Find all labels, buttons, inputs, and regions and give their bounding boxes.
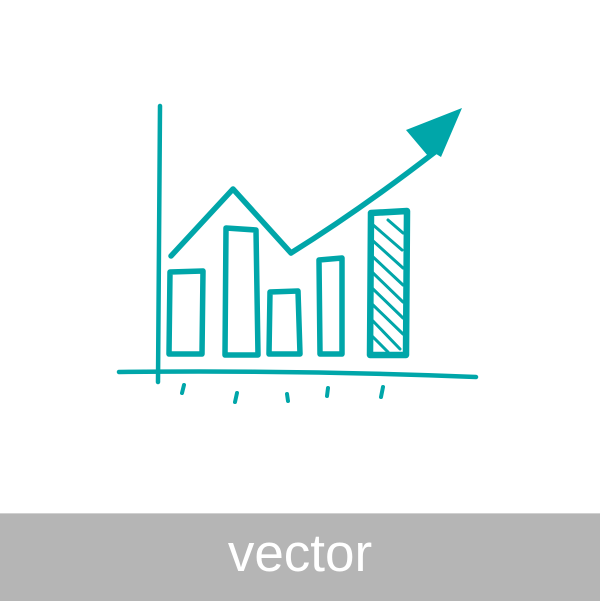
axis ticks	[182, 385, 383, 402]
trend line	[171, 152, 435, 256]
arrowhead	[406, 108, 462, 157]
bars	[169, 228, 342, 355]
bottom band	[0, 513, 600, 601]
label: vector: vector	[228, 524, 372, 583]
hatched bar	[370, 211, 407, 355]
axes	[119, 106, 476, 382]
